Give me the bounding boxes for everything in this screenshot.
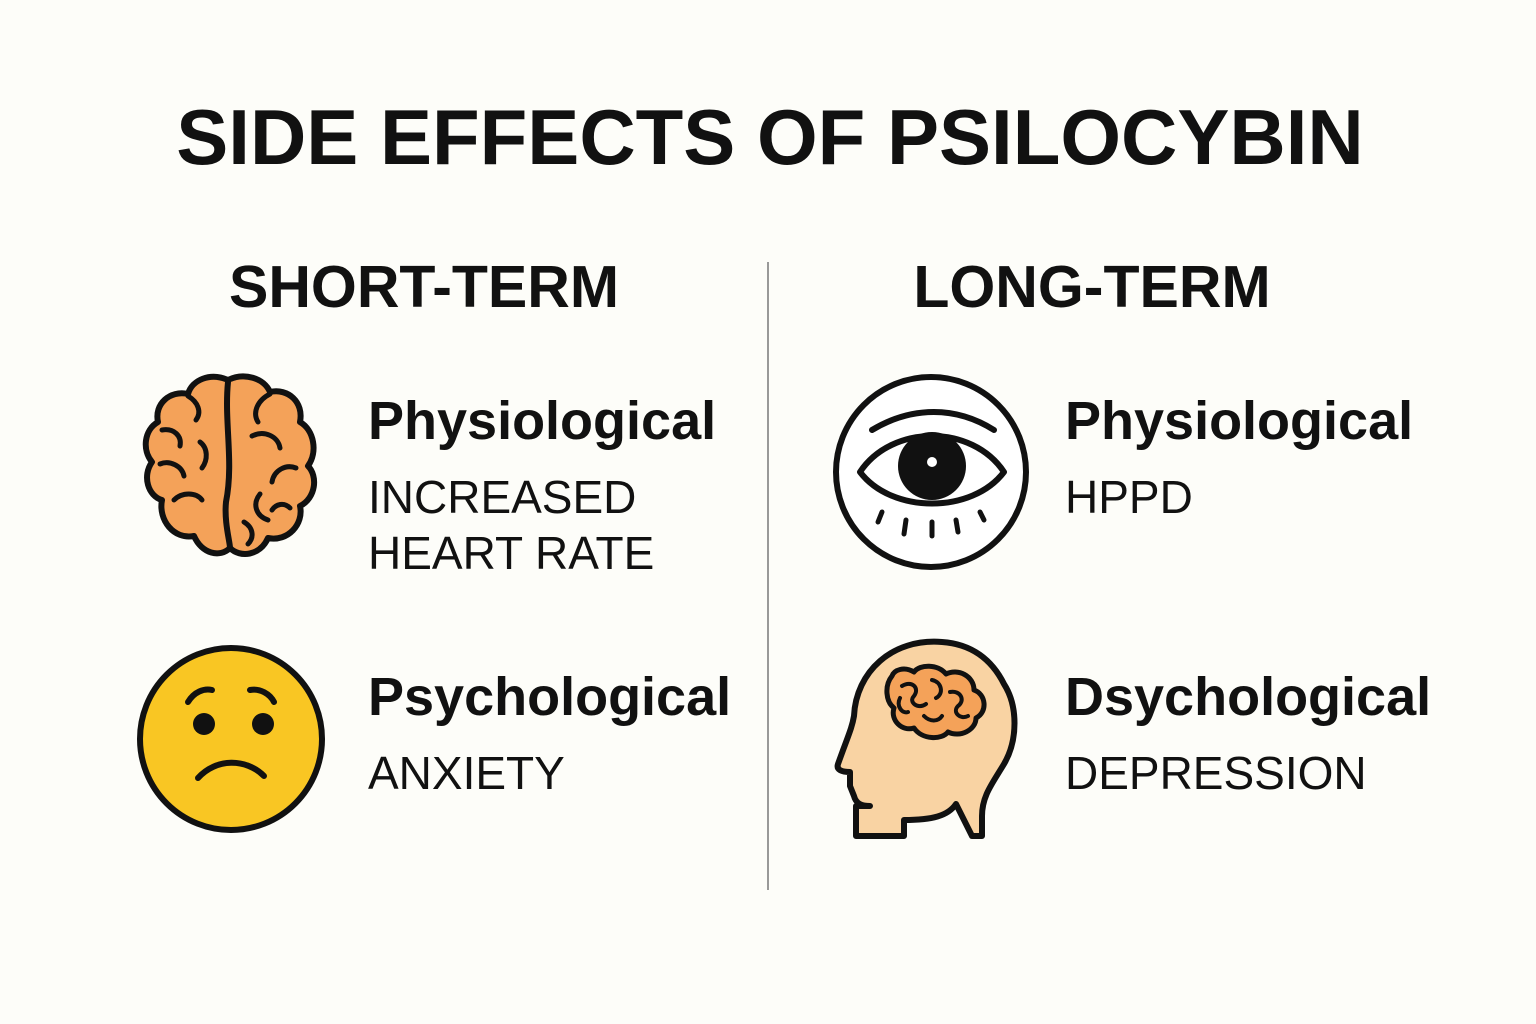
text: long-term psychological (1065, 667, 1431, 799)
icon: brain (142, 373, 318, 557)
text: long-term psychological: Dsychological (1065, 667, 1431, 727)
text: short-term psychological: ANXIETY (368, 747, 565, 799)
text: long-term psychological: DEPRESSION (1065, 747, 1367, 799)
icon: worried face (137, 645, 325, 833)
icon: eye (833, 374, 1029, 570)
text: short-term physiological (368, 391, 716, 579)
heading: short-term: SHORT-TERM (229, 254, 619, 320)
text: short-term psychological (368, 667, 731, 799)
icon: head with brain (834, 638, 1018, 839)
text: long-term physiological: HPPD (1065, 471, 1193, 523)
text: short-term psychological: Psychological (368, 667, 731, 727)
text: long-term physiological: Physiological (1065, 391, 1413, 451)
divider (767, 262, 769, 890)
text: short-term physiological: INCREASED (368, 471, 636, 523)
text: long-term physiological (1065, 391, 1413, 523)
title: SIDE EFFECTS OF PSILOCYBIN (176, 93, 1364, 181)
text: short-term physiological: HEART RATE (368, 527, 654, 579)
heading: long-term: LONG-TERM (913, 254, 1271, 320)
text: short-term physiological: Physiological (368, 391, 716, 451)
